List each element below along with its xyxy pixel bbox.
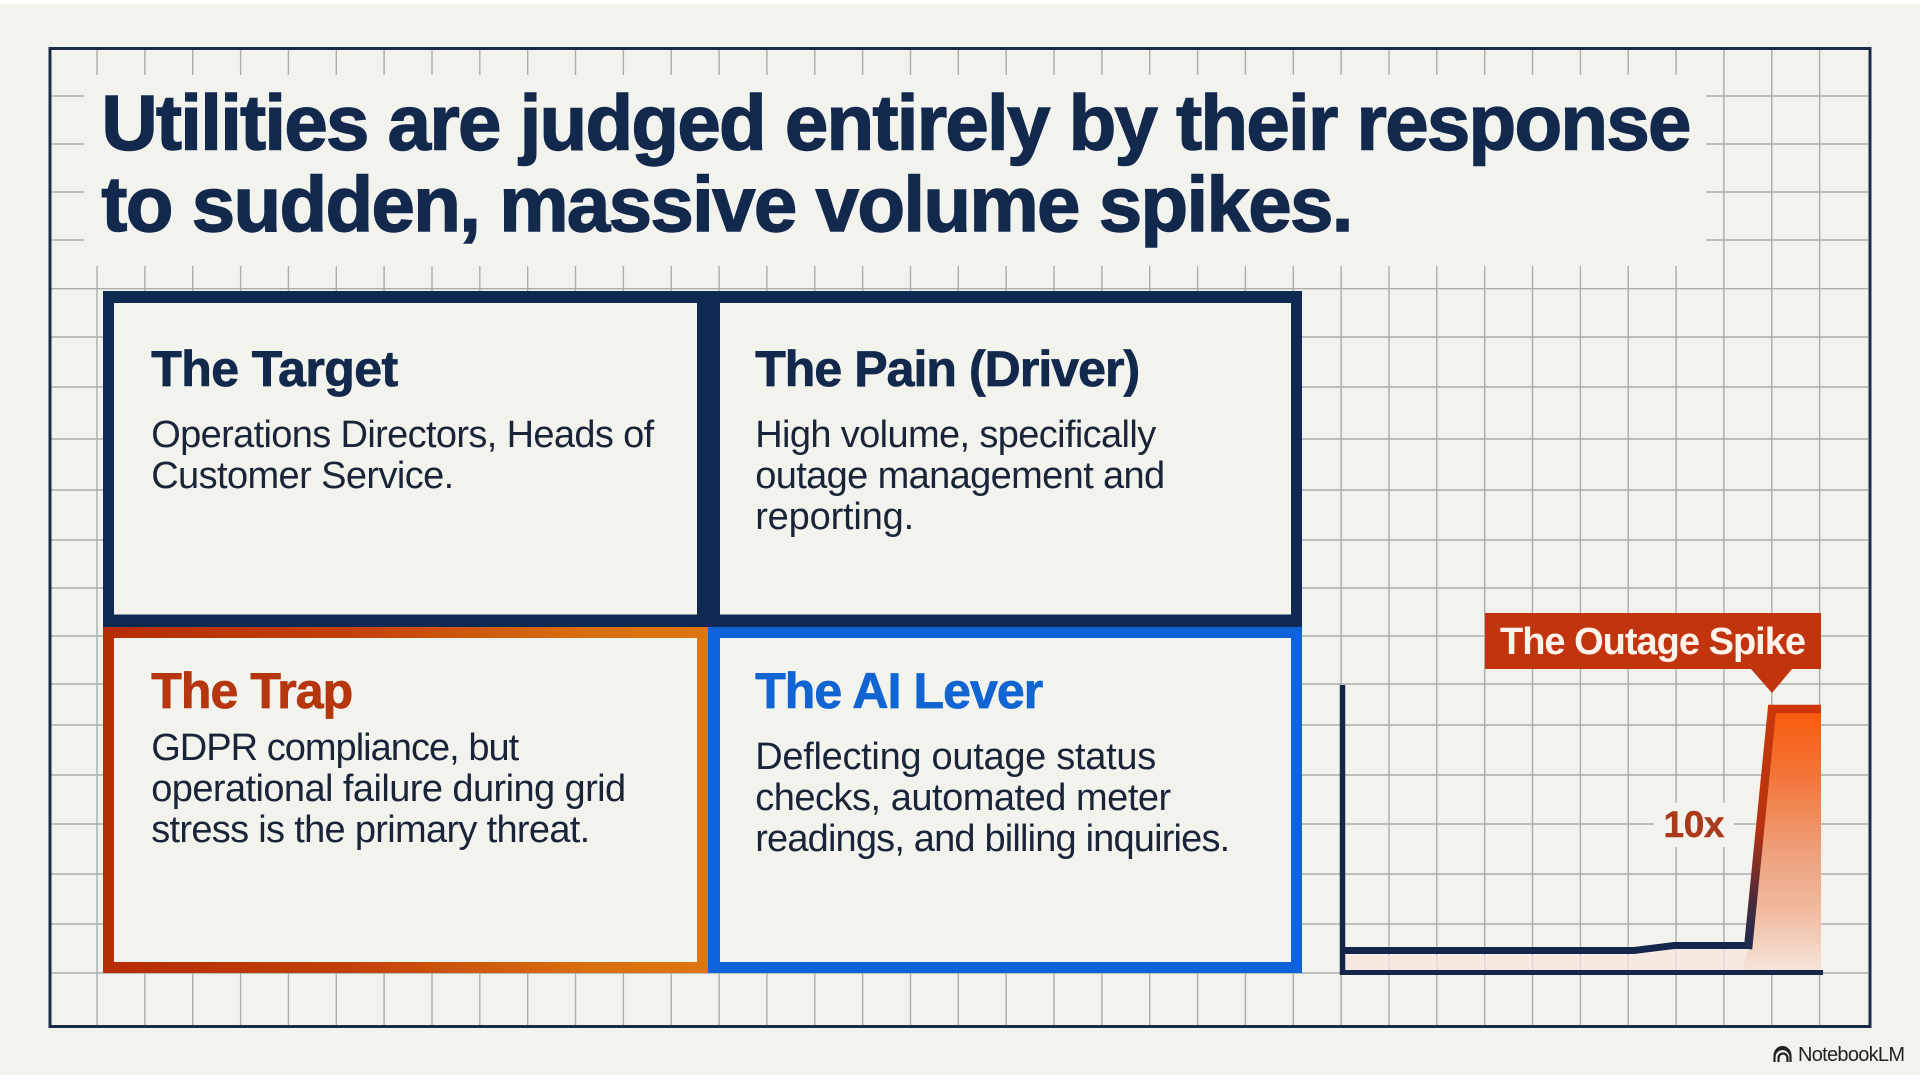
title: [101, 78, 1691, 248]
logo: NotebookLM: NotebookLM: [1798, 1044, 1905, 1066]
area fill under spike: [1742, 713, 1821, 972]
callout: the outage spike: [1485, 613, 1821, 693]
label: 10x: 10x: [1664, 804, 1725, 845]
text: trap description: stress is the primary threat.: [151, 809, 590, 851]
baseline volume line: [1342, 946, 1748, 950]
area fill under baseline: [1342, 949, 1748, 972]
chart: outage spike line: [1340, 685, 1823, 975]
x axis: [1340, 970, 1823, 975]
text: pain description: [755, 414, 1165, 538]
title: to sudden, massive volume spikes.: [101, 160, 1353, 248]
text: trap description: [151, 727, 626, 851]
y axis: [1340, 685, 1345, 975]
callout: the outage spike: The Outage Spike: [1500, 621, 1806, 663]
spike line: [1748, 709, 1821, 949]
text: target audience: Operations Directors, Heads of: [151, 414, 655, 456]
title: Utilities are judged entirely by their response: [101, 78, 1691, 166]
panel: the target: [103, 291, 708, 627]
icon: notebook arcs: [1774, 1047, 1790, 1062]
panel: the pain: [708, 291, 1302, 627]
heading: the ai lever: The AI Lever: [755, 663, 1043, 719]
text: pain description: reporting.: [755, 496, 914, 538]
text: trap description: operational failure during grid: [151, 768, 626, 810]
text: target audience: Customer Service.: [151, 455, 454, 497]
text: pain description: outage management and: [755, 455, 1165, 497]
text: ai lever description: checks, automated meter: [755, 777, 1172, 819]
text: trap description: GDPR compliance, but: [151, 727, 520, 769]
panel: the ai lever: [708, 627, 1302, 973]
text: ai lever description: [755, 736, 1230, 860]
heading: the pain: The Pain (Driver): [755, 341, 1140, 397]
text: ai lever description: Deflecting outage status: [755, 736, 1156, 778]
text: target audience: [151, 414, 655, 497]
heading: the trap: The Trap: [151, 663, 353, 719]
text: ai lever description: readings, and billing inquiries.: [755, 818, 1230, 860]
text: pain description: High volume, specifically: [755, 414, 1156, 456]
heading: the target: The Target: [151, 341, 399, 397]
panel: the trap: [103, 627, 708, 973]
